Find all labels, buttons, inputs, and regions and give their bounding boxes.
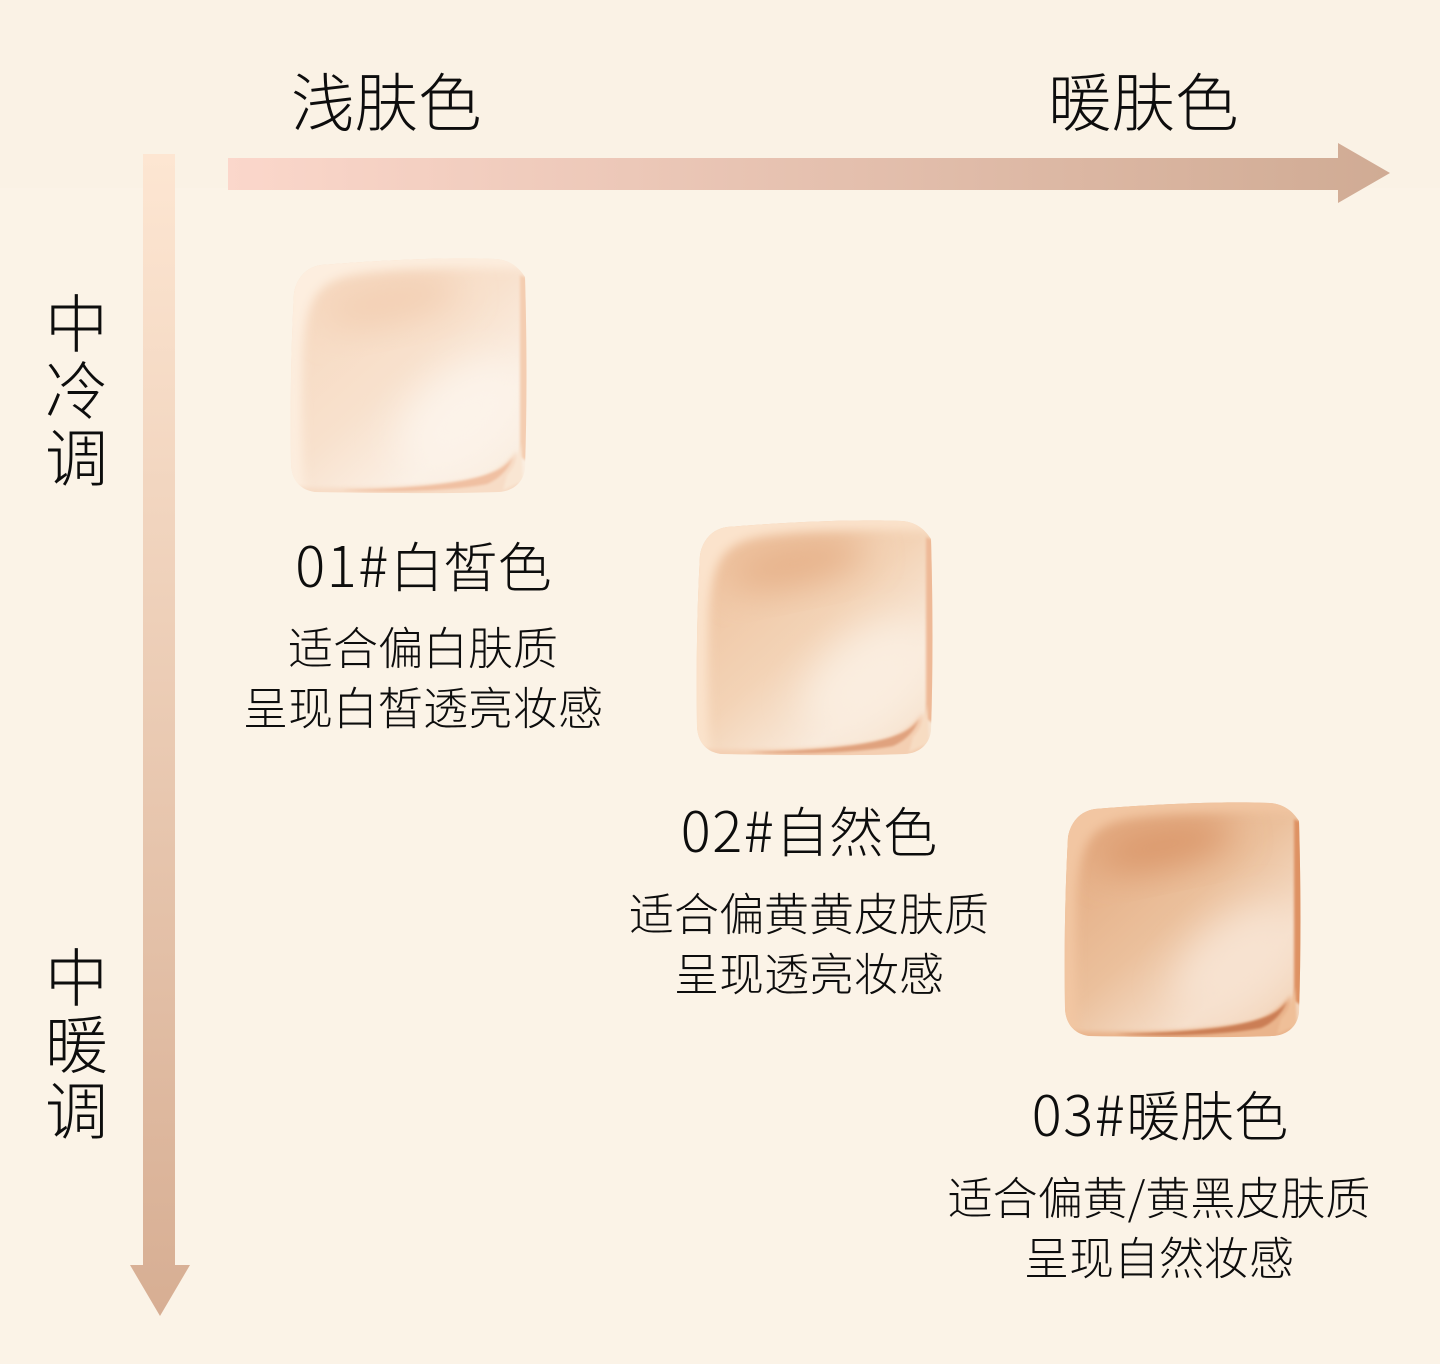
- shade 03 description: 适合偏黄/黄黑皮肤质: [948, 1162, 1370, 1228]
- arrow: vertical cool to warm: [130, 154, 190, 1316]
- shade 01 description: 适合偏白肤质: [288, 612, 558, 678]
- axis label: neutral warm: 中: [45, 929, 108, 1020]
- axis label: neutral warm: 调: [45, 1062, 108, 1153]
- textured top band: [0, 0, 1440, 188]
- shade 01 title: 01#白皙色: [295, 523, 552, 604]
- heading: warm skin tone: 暖肤色: [1048, 53, 1238, 145]
- shade 03 description: 呈现自然妆感: [1024, 1222, 1294, 1288]
- shade 02 description: 呈现透亮妆感: [674, 938, 944, 1004]
- shade 01 description: [243, 612, 603, 738]
- heading: light skin tone: 浅肤色: [291, 53, 482, 145]
- shade 03 description: [948, 1162, 1370, 1288]
- axis label: neutral warm: 暖: [45, 996, 108, 1087]
- axis label: neutral cool: [45, 275, 108, 500]
- axis label: neutral warm: [45, 929, 108, 1153]
- shade 03 title: 03#暖肤色: [1032, 1072, 1288, 1153]
- swatch 03: [1064, 802, 1300, 1038]
- swatch 02: [696, 520, 932, 756]
- shade 02 description: 适合偏黄黄皮肤质: [629, 878, 989, 944]
- shade 02 title: 02#自然色: [681, 788, 937, 869]
- swatch 01: [290, 258, 526, 494]
- axis label: neutral cool: 调: [45, 409, 108, 500]
- shade 01 description: 呈现白皙透亮妆感: [243, 672, 603, 738]
- axis label: neutral cool: 冷: [45, 342, 108, 433]
- axis label: neutral cool: 中: [45, 275, 108, 366]
- arrow: horizontal light to warm: [228, 143, 1390, 203]
- shade 02 description: [629, 878, 989, 1004]
